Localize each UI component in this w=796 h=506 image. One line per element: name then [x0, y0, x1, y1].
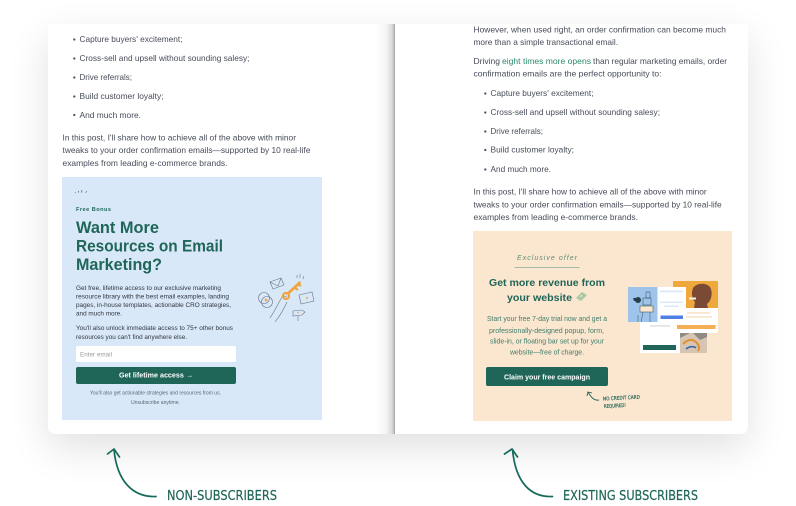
- left bullet list: Capture buyers' excitement;: [80, 34, 182, 44]
- left page text: [62, 34, 311, 168]
- signup description: [76, 285, 234, 341]
- left intro paragraph: tweaks to your order confirmation emails—supported by 10 real-life: [62, 145, 311, 155]
- right closing paragraph: [474, 187, 722, 222]
- left bullet list: Cross-sell and upsell without sounding salesy;: [80, 53, 250, 63]
- button: claim your free campaign: Claim your free campaign: [504, 372, 590, 382]
- signup description: You'll also unlock immediate access to 75+ other bonus: [76, 325, 234, 332]
- panel: free bonus signup: [62, 177, 322, 420]
- left intro paragraph: [62, 132, 311, 168]
- right intro paragraphs: However, when used right, an order confirmation can become much: [474, 24, 726, 34]
- right bullet list: Cross-sell and upsell without sounding salesy;: [490, 107, 660, 117]
- left bullet list: And much more.: [80, 110, 141, 120]
- button: claim your free campaign: [486, 367, 608, 386]
- offer heading: your website: [507, 293, 572, 304]
- eyebrow: exclusive offer: Exclusive offer: [517, 255, 578, 262]
- signup heading: Want More: [76, 219, 159, 237]
- book spine shadow: [376, 24, 395, 434]
- illustration: popup and form collage: [628, 281, 718, 353]
- portrait popup card: [673, 281, 718, 333]
- signup heading: [76, 219, 223, 274]
- offer heading: [489, 278, 605, 304]
- blue illustrated popup card: [628, 287, 686, 322]
- signup fine print: Unsubscribe anytime.: [131, 400, 180, 406]
- button: get lifetime access: Get lifetime access →: [119, 370, 193, 380]
- arrow: points to claim button: [587, 392, 599, 400]
- right intro paragraphs: [474, 24, 727, 79]
- colourful photo: [680, 328, 707, 353]
- panel: open book page card: [48, 24, 748, 434]
- signup fine print: [90, 390, 221, 406]
- right bullet list: Drive referrals;: [490, 126, 543, 136]
- note: no credit card required: REQUIRED!: [604, 403, 626, 410]
- right intro paragraphs: confirmation emails are the perfect opportunity to:: [474, 69, 662, 79]
- note: no credit card required: [603, 395, 640, 410]
- left bullet list: [73, 34, 249, 120]
- offer description: [487, 314, 607, 357]
- right bullet list: [484, 88, 660, 174]
- lower white form card: [640, 318, 681, 353]
- eyebrow: exclusive offer: [514, 255, 580, 268]
- label: non-subscribers: NON-SUBSCRIBERS: [167, 488, 277, 504]
- right closing paragraph: tweaks to your order confirmation emails—supported by 10 real-life: [474, 200, 722, 210]
- left intro paragraph: examples from leading e-commerce brands.: [62, 158, 228, 168]
- right closing paragraph: examples from leading e-commerce brands.: [474, 212, 638, 222]
- right intro paragraphs: than regular marketing emails, order: [593, 56, 727, 66]
- right bullet list: Build customer loyalty;: [490, 145, 574, 155]
- button: get lifetime access: [76, 367, 236, 384]
- left bullet list: Drive referrals;: [80, 72, 132, 82]
- decorative sparks icon: [76, 190, 87, 193]
- right closing paragraph: In this post, I'll share how to achieve all of the above with minor: [474, 187, 707, 197]
- email input: Enter email: [80, 352, 113, 358]
- icon: hand holding key with envelope and doodles: [258, 274, 314, 322]
- right intro paragraphs: more than a simple transactional email.: [474, 37, 618, 47]
- arrow: existing subscribers: [504, 449, 552, 497]
- right page text: [474, 24, 727, 222]
- signup description: pages, in-house templates, actionable CRO strategies,: [76, 302, 231, 309]
- signup heading: Marketing?: [76, 256, 162, 274]
- signup description: Get free, lifetime access to our exclusive marketing: [76, 285, 221, 292]
- email input: [76, 346, 236, 362]
- right intro paragraphs: eight times more opens: [502, 56, 591, 66]
- right bullet list: And much more.: [490, 164, 551, 174]
- signup heading: Resources on Email: [76, 238, 223, 256]
- offer description: slide-in, or floating bar set up for your: [490, 337, 605, 346]
- signup description: and much more.: [76, 311, 122, 318]
- signup description: resource library with the best email examples, landing: [76, 294, 229, 301]
- right bullet list: Capture buyers' excitement;: [490, 88, 594, 98]
- panel: exclusive offer: [473, 231, 732, 421]
- offer description: website—free of charge.: [509, 348, 584, 357]
- left intro paragraph: In this post, I'll share how to achieve all of the above with minor: [62, 132, 296, 142]
- signup fine print: You'll also get actionable strategies and resources from us.: [90, 390, 221, 396]
- offer description: professionally-designed popup, form,: [489, 326, 604, 335]
- offer description: Start your free 7-day trial now and get a: [487, 314, 607, 323]
- left bullet list: Build customer loyalty;: [80, 91, 164, 101]
- icon: money: [576, 292, 587, 301]
- signup description: resources you can't find anywhere else.: [76, 334, 187, 341]
- right intro paragraphs: Driving: [474, 56, 500, 66]
- note: no credit card required: NO CREDIT CARD: [603, 395, 640, 402]
- eyebrow: free bonus: Free Bonus: [76, 207, 111, 213]
- label: existing subscribers: EXISTING SUBSCRIBERS: [563, 488, 698, 504]
- offer heading: Get more revenue from: [489, 278, 605, 289]
- arrow: non-subscribers: [108, 449, 156, 497]
